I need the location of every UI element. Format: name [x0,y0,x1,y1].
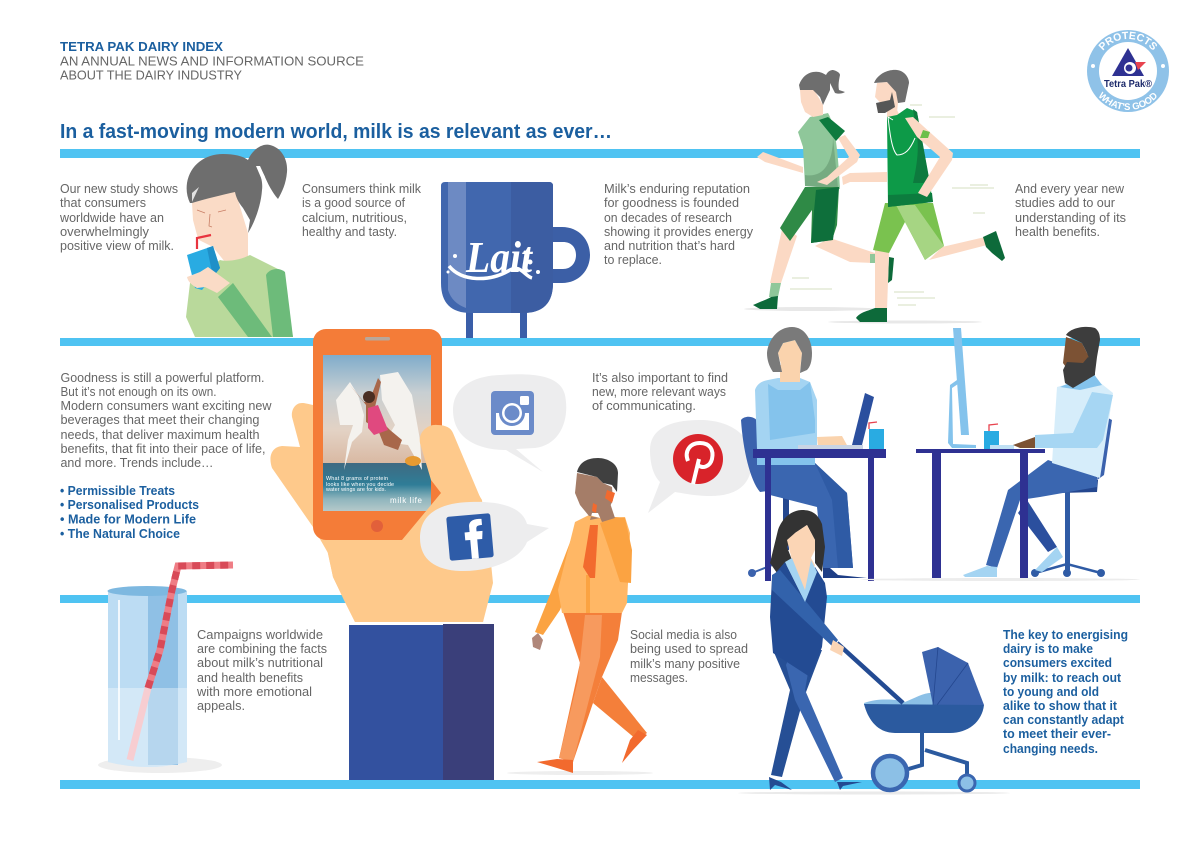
text: health studies [1015,182,1126,239]
text: key takeaway: dairy is to make [1003,642,1093,656]
text: social media [630,628,748,685]
laptop [798,393,874,449]
legs [768,463,853,568]
text: key takeaway: The key to energising [1003,628,1128,642]
phone [313,329,442,540]
text: reputation: Milk’s enduring reputation [604,182,750,196]
text: campaigns: and health benefits [197,671,303,685]
text: goodness platform: benefits, that fit into their pace of life, [60,442,266,456]
text: communication [592,371,728,413]
text: key takeaway: to young and old [1003,685,1099,699]
text: social media: being used to spread [630,642,748,656]
illustration: woman at laptop [741,327,886,581]
drink carton [869,422,884,449]
male runner [842,70,1005,322]
text: goodness platform: Modern consumers want exciting new [60,399,272,413]
icon: Pinterest [673,434,723,484]
text: consumers view: overwhelmingly [60,225,150,239]
header: publication name: AN ANNUAL NEWS AND INFORMATION SOURCE [60,54,364,68]
head and beard [1060,373,1102,390]
female runner [753,70,894,309]
icon: Facebook [446,513,494,561]
straw and carton [197,235,211,249]
mug lettering: Lait [465,233,534,282]
illustration: man on phone [507,458,653,775]
text: consumers view [59,182,178,253]
hair [770,510,825,573]
text: health studies: studies add to our [1015,196,1115,210]
pram [837,643,984,791]
logo: Tetra Pak protects what's good: WHAT'S GOOD [1099,92,1156,110]
text: goodness platform: needs, that deliver maximum health [60,428,260,442]
jacket [770,562,827,677]
desk [916,449,1045,578]
text: communication: It’s also important to find [592,371,728,385]
text: milk benefits: calcium, nutritious, [302,211,407,225]
illustration: man at computer [860,327,1140,581]
text: goodness platform: and more. Trends include… [60,456,214,470]
left arm [535,537,575,635]
shirt [558,515,630,613]
trousers and shoes [593,677,647,740]
tie [583,525,598,578]
text: reputation: showing it provides energy [604,225,754,239]
list: trends: • Permissible Treats [60,484,175,498]
photo caption: milk life [390,496,423,505]
text: communication: new, more relevant ways [592,385,726,399]
text: social media: milk’s many positive [630,657,740,671]
hand behind phone [270,403,490,622]
text: reputation [604,182,754,267]
header: publication name [60,40,364,82]
header: publication name: ABOUT THE DAIRY INDUSTRY [60,68,243,82]
text: campaigns: about milk’s nutritional [197,656,323,670]
legs [771,650,822,777]
chair [741,417,775,492]
text: milk benefits: healthy and tasty. [302,225,397,239]
text: goodness platform: Goodness is still a powerful platform. [60,371,264,385]
text: key takeaway [1003,628,1128,756]
logo: Tetra Pak protects what's good: PROTECTS [1098,32,1157,50]
text: milk benefits: Consumers think milk [302,182,422,196]
text: key takeaway: changing needs. [1003,742,1098,756]
chair [1097,418,1112,480]
text: campaigns: appeals. [197,699,245,713]
list: trends: • Personalised Products [60,498,199,512]
text: milk benefits [302,182,422,239]
text: consumers view: that consumers [60,196,146,210]
text: reputation: for goodness is founded [604,196,739,210]
text: consumers view: worldwide have an [59,211,164,225]
text: communication: of communicating. [592,399,696,413]
face [192,190,248,262]
header: publication name: TETRA PAK DAIRY INDEX [60,40,224,54]
title: In a fast-moving modern world, milk is as relevant as ever… [60,121,612,143]
front leg [986,460,1097,568]
hair and ponytail [187,145,287,233]
text: social media: messages. [630,671,688,685]
illustration: hand holding phone [270,329,494,780]
text: reputation: to replace. [604,253,662,267]
photo caption [325,476,423,505]
text: health studies: understanding of its [1015,211,1126,225]
text: key takeaway: consumers excited [1003,656,1112,670]
photo caption: water wings are for kids. [325,487,386,493]
photo caption: looks like when you decide [326,482,394,488]
text: campaigns: are combining the facts [197,642,327,656]
illustration: two runners [744,70,1005,324]
raised arm [600,517,632,583]
text: consumers view: positive view of milk. [60,239,174,253]
illustration: woman drinking milk [186,145,293,337]
text: key takeaway: to meet their ever- [1003,727,1111,741]
text: campaigns [196,628,327,713]
text: key takeaway: by milk: to reach out [1003,671,1122,685]
list: trends: • The Natural Choice [60,527,180,541]
ground shadows and speed lines [744,307,876,311]
icon: Instagram [491,391,534,435]
list: trends: • Made for Modern Life [60,512,196,526]
text: goodness platform [60,371,272,470]
desk [753,449,886,581]
text: reputation: and nutrition that’s hard [604,239,735,253]
torso [1052,377,1113,478]
straw [130,565,233,760]
text: consumers view: Our new study shows [60,182,178,196]
speech bubble: Pinterest [648,420,752,513]
sweater [186,255,293,337]
illustration: Lait mug [441,182,590,338]
sleeve cuff [349,624,494,780]
text: health studies: health benefits. [1015,225,1100,239]
torso [755,378,817,449]
thumb and palm [325,425,493,622]
illustration: woman with pram [738,510,1010,794]
monitor [948,328,976,448]
text: reputation: on decades of research [604,211,732,225]
text: campaigns: with more emotional [196,685,312,699]
list: trends [60,484,199,541]
text: social media: Social media is also [630,628,737,642]
text: goodness platform: beverages that meet their changing [60,413,260,427]
logo: Tetra Pak protects what's good: Tetra Pak® [1104,79,1153,90]
phone screen photo [323,355,431,511]
illustration: glass of milk with straw [98,565,233,773]
text: goodness platform: But it’s not enough on its own. [60,385,216,399]
head and phone [575,473,613,520]
head [780,365,800,382]
back leg [1018,500,1057,552]
drink carton [984,424,1014,449]
text: key takeaway: can constantly adapt [1003,713,1125,727]
speech bubble: Instagram [453,374,566,472]
text: key takeaway: alike to show that it [1003,699,1118,713]
face and neck [787,525,815,600]
text: milk benefits: is a good source of [302,196,405,210]
speech bubble: Facebook [420,502,549,571]
photo caption: What 8 grams of protein [326,476,388,482]
logo: Tetra Pak protects what's good [1087,30,1169,112]
text: health studies: And every year new [1015,182,1125,196]
text: campaigns: Campaigns worldwide [197,628,323,642]
hand [187,267,230,293]
